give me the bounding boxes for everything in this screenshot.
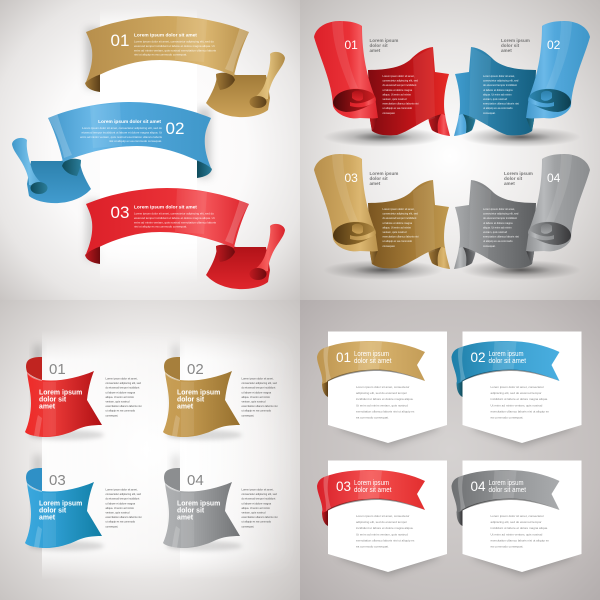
body text: incididunt ut labore et dolore magna aliqua. bbox=[356, 397, 414, 401]
label: Lorem ipsum bbox=[370, 171, 398, 176]
red ribbon text: enim ad minim veniam, quis nostrud exercitation ullamco laboris bbox=[134, 220, 216, 224]
grey flag 04 bbox=[163, 468, 278, 548]
body text: ut aliquip ex ea commodo bbox=[382, 239, 413, 243]
body text: do eiusmod tempor incididunt bbox=[242, 386, 276, 390]
body text: consequat. bbox=[483, 111, 496, 115]
label: amet bbox=[370, 181, 381, 186]
gold scroll 03 bbox=[314, 154, 450, 269]
card 03 bbox=[317, 460, 447, 572]
label: amet bbox=[501, 48, 512, 53]
paper sheets and edge shadows bbox=[30, 338, 278, 572]
ribbon heading bbox=[354, 349, 392, 365]
body text: Lorem ipsum dolor sit amet, consectetur bbox=[356, 514, 409, 518]
ribbon heading: dolor sit amet bbox=[354, 356, 392, 365]
gold ribbon text bbox=[134, 32, 216, 57]
ribbon heading: dolor sit amet bbox=[354, 485, 392, 494]
body text: consequat. bbox=[382, 244, 395, 248]
body text: Lorem ipsum dolor sit amet, bbox=[106, 488, 138, 492]
body text: adipiscing elit, sed do eiusmod tempor bbox=[490, 520, 542, 524]
number 01: 01 bbox=[49, 361, 66, 378]
label: Lorem ipsum bbox=[370, 38, 398, 43]
label: dolor sit bbox=[370, 176, 388, 181]
body text: do eiusmod tempor incididunt bbox=[483, 216, 517, 220]
blue scroll 02 bbox=[454, 21, 590, 136]
number 03: 03 bbox=[336, 479, 351, 494]
number 02: 02 bbox=[470, 350, 486, 365]
body text: consectetur adipiscing elit, sed bbox=[106, 492, 141, 496]
red ribbon text: Lorem ipsum dolor sit amet bbox=[134, 204, 197, 210]
body text: consequat. bbox=[106, 524, 118, 528]
body text: aliqua. Ut enim ad minim bbox=[483, 92, 512, 96]
flag heading: amet bbox=[39, 404, 56, 410]
body text: consectetur adipiscing elit, sed bbox=[382, 212, 418, 216]
number 03: 03 bbox=[344, 171, 358, 185]
body text: ut labore et dolore magna bbox=[483, 221, 513, 225]
body text: veniam, quis nostrud bbox=[106, 400, 130, 404]
body text: exercitation ullamco laboris nisi ut aliquip ex bbox=[356, 538, 415, 542]
body text: consequat. bbox=[242, 524, 254, 528]
ribbon heading: dolor sit amet bbox=[488, 485, 527, 494]
body text: adipiscing elit, sed do eiusmod tempor bbox=[490, 391, 542, 395]
body text: exercitation ullamco laboris nisi ut aliquip ex bbox=[356, 409, 415, 413]
ribbon 04 bbox=[452, 470, 560, 526]
gold ribbon 01 bbox=[85, 16, 285, 117]
number 02: 02 bbox=[187, 361, 204, 378]
flag heading: dolor sit bbox=[177, 508, 205, 514]
body text: Lorem ipsum dolor sit amet, consectetur bbox=[490, 385, 544, 389]
body text: Ut enim ad minim veniam, quis nostrud bbox=[356, 403, 408, 407]
ribbon heading bbox=[488, 478, 527, 494]
number 04: 04 bbox=[187, 472, 204, 489]
ribbon heading bbox=[488, 349, 527, 365]
label: Lorem ipsum bbox=[504, 171, 533, 176]
background: quadrant 3 bbox=[0, 300, 300, 600]
number 03: 03 bbox=[49, 472, 66, 489]
body text: Lorem ipsum dolor sit amet, bbox=[382, 75, 415, 78]
body text: aliqua. Ut enim ad minim bbox=[483, 225, 512, 229]
body text: Lorem ipsum dolor sit amet, bbox=[483, 75, 515, 78]
body text: incididunt ut labore et dolore magna aliqua. bbox=[490, 526, 548, 530]
label: dolor sit bbox=[504, 176, 523, 181]
body text: Ut enim ad minim veniam, quis nostrud bbox=[490, 403, 543, 407]
card 04 bbox=[452, 460, 582, 572]
body text: aliqua. Ut enim ad minim bbox=[382, 225, 411, 229]
body text: Lorem ipsum dolor sit amet, bbox=[242, 378, 274, 380]
body text: do eiusmod tempor incididunt bbox=[483, 83, 517, 87]
ribbon heading bbox=[354, 478, 392, 494]
number 03: 03 bbox=[110, 203, 129, 222]
blue ribbon text: enim ad minim veniam, quis nostrud exercitation ullamco laboris bbox=[80, 135, 163, 139]
ribbon heading: Lorem ipsum bbox=[488, 478, 524, 487]
body text: veniam, quis nostrud bbox=[483, 97, 507, 101]
gold ribbon text: eiusmod tempor incididunt ut labore et dolore magna aliqua. Ut bbox=[134, 44, 215, 48]
ribbon 01 bbox=[317, 341, 425, 397]
ribbon 02 bbox=[452, 341, 560, 397]
number 01: 01 bbox=[110, 31, 129, 50]
flag heading: dolor sit bbox=[39, 396, 67, 404]
background: quadrant 2 bbox=[300, 0, 600, 300]
red ribbon text: Lorem ipsum dolor sit amet, consectetur adipiscing elit, sed do bbox=[134, 212, 214, 216]
flag heading: amet bbox=[177, 404, 194, 410]
body text: veniam, quis nostrud bbox=[106, 510, 130, 514]
body text: exercitation ullamco laboris nisi ut aliquip ex bbox=[490, 538, 549, 542]
ground shadows bbox=[323, 127, 581, 280]
number 01: 01 bbox=[344, 38, 358, 52]
body text: ut labore et dolore magna bbox=[242, 390, 272, 394]
blue ribbon text: nisi ut aliquip ex ea commodo consequat. bbox=[109, 139, 162, 143]
body text: ea commodo consequat. bbox=[490, 416, 524, 420]
body text: consectetur adipiscing elit, sed bbox=[483, 79, 519, 83]
blue ribbon text: eiusmod tempor incididunt ut labore et dolore magna aliqua. Ut bbox=[81, 130, 162, 134]
red ribbon 03 bbox=[85, 188, 285, 289]
gold ribbon text: Lorem ipsum dolor sit amet bbox=[134, 32, 197, 38]
flag heading: dolor sit bbox=[177, 396, 205, 404]
body text: consequat. bbox=[382, 111, 395, 115]
body text: Lorem ipsum dolor sit amet, consectetur bbox=[356, 385, 409, 389]
body text: ut aliquip ex ea commodo bbox=[483, 106, 513, 110]
blue ribbon text: Lorem ipsum dolor sit amet, consectetur adipiscing elit, sed do bbox=[82, 126, 162, 130]
flag heading: Lorem ipsum bbox=[39, 390, 82, 396]
body text: veniam, quis nostrud bbox=[483, 230, 507, 234]
ribbon heading: Lorem ipsum bbox=[488, 349, 524, 358]
body text: do eiusmod tempor incididunt bbox=[106, 386, 140, 390]
body text: ut labore et dolore magna bbox=[382, 88, 413, 92]
body text: ut labore et dolore magna bbox=[242, 501, 272, 505]
flag heading: Lorem ipsum bbox=[177, 500, 220, 508]
flag heading: amet bbox=[39, 514, 56, 522]
body text: Lorem ipsum dolor sit amet, consectetur bbox=[490, 514, 544, 518]
flag heading: Lorem ipsum bbox=[39, 500, 82, 508]
label: Lorem ipsum bbox=[501, 38, 530, 43]
body text: adipiscing elit, sed do eiusmod tempor bbox=[356, 520, 407, 524]
blue flag 03 bbox=[25, 468, 142, 548]
body text: consectetur adipiscing elit, sed bbox=[483, 212, 519, 216]
body text: veniam, quis nostrud bbox=[382, 230, 407, 234]
body text: consectetur adipiscing elit, sed bbox=[106, 381, 141, 385]
number 02: 02 bbox=[166, 119, 184, 138]
body text: incididunt ut labore et dolore magna aliqua. bbox=[490, 397, 548, 401]
ribbon 03 bbox=[317, 470, 425, 526]
body text: exercitation ullamco laboris nisi ut aliquip ex bbox=[490, 409, 549, 413]
panel: four flag ribbons bbox=[25, 338, 278, 572]
panel: four scroll ribbons bbox=[314, 21, 590, 280]
body text: Lorem ipsum dolor sit amet, bbox=[382, 208, 415, 211]
label: amet bbox=[370, 48, 381, 53]
body text: aliqua. Ut enim ad minim bbox=[382, 92, 411, 96]
body text: consequat. bbox=[242, 413, 254, 417]
red ribbon text bbox=[134, 204, 216, 229]
background: quadrant 1 bbox=[0, 0, 300, 300]
body text: Lorem ipsum dolor sit amet, bbox=[483, 208, 515, 211]
body text: ut aliquip ex ea commodo bbox=[242, 520, 272, 524]
body text: aliqua. Ut enim ad minim bbox=[106, 395, 134, 399]
panel: three arc ribbons bbox=[12, 8, 285, 289]
ribbon heading: dolor sit amet bbox=[488, 356, 527, 365]
body text: consequat. bbox=[483, 244, 496, 248]
label: dolor sit bbox=[501, 43, 520, 48]
body text: aliqua. Ut enim ad minim bbox=[242, 506, 270, 510]
blue ribbon text: Lorem ipsum dolor sit amet bbox=[98, 119, 161, 125]
body text: exercitation ullamco laboris nisi bbox=[106, 515, 142, 519]
body text: do eiusmod tempor incididunt bbox=[382, 216, 417, 220]
card shadows bbox=[338, 422, 574, 575]
blue ribbon text bbox=[80, 119, 163, 143]
body text: incididunt ut labore et dolore magna aliqua. bbox=[356, 526, 414, 530]
body text: consectetur adipiscing elit, sed bbox=[382, 79, 418, 83]
body text: ut labore et dolore magna bbox=[106, 390, 136, 394]
blue ribbon 02 bbox=[12, 102, 212, 203]
body text: Lorem ipsum dolor sit amet, bbox=[106, 378, 138, 380]
body text: veniam, quis nostrud bbox=[242, 510, 266, 514]
body text: consectetur adipiscing elit, sed bbox=[242, 492, 277, 496]
body text: ea commodo consequat. bbox=[490, 544, 524, 548]
flag shadows bbox=[28, 430, 242, 551]
red flag 01 bbox=[25, 357, 142, 437]
body text: adipiscing elit, sed do eiusmod tempor bbox=[356, 391, 407, 395]
number 01: 01 bbox=[336, 350, 351, 365]
body text: exercitation ullamco laboris nisi bbox=[382, 102, 419, 106]
body text: aliqua. Ut enim ad minim bbox=[106, 506, 134, 510]
body text: Ut enim ad minim veniam, quis nostrud bbox=[356, 532, 408, 536]
card 02 bbox=[452, 332, 582, 443]
body text: ut aliquip ex ea commodo bbox=[106, 409, 136, 413]
panel: four pointed cards bbox=[317, 332, 582, 575]
body text: exercitation ullamco laboris nisi bbox=[382, 235, 419, 239]
body text: ut aliquip ex ea commodo bbox=[106, 520, 136, 524]
paper edge shadows bbox=[86, 8, 211, 283]
body text: ut aliquip ex ea commodo bbox=[483, 239, 513, 243]
body text: ea commodo consequat. bbox=[356, 544, 389, 548]
body text: aliqua. Ut enim ad minim bbox=[242, 395, 270, 399]
body text: exercitation ullamco laboris nisi bbox=[483, 102, 519, 106]
red ribbon text: nisi ut aliquip ex ea commodo consequat. bbox=[134, 225, 187, 229]
body text: exercitation ullamco laboris nisi bbox=[483, 235, 519, 239]
body text: veniam, quis nostrud bbox=[382, 97, 407, 101]
gold ribbon text: nisi ut aliquip ex ea commodo consequat. bbox=[134, 53, 187, 57]
body text: consectetur adipiscing elit, sed bbox=[242, 381, 277, 385]
label: amet bbox=[504, 181, 515, 186]
body text: do eiusmod tempor incididunt bbox=[106, 497, 140, 501]
number 04: 04 bbox=[470, 479, 486, 494]
card 01 bbox=[317, 332, 447, 443]
flag heading: dolor sit bbox=[39, 508, 67, 514]
body text: exercitation ullamco laboris nisi bbox=[242, 404, 278, 408]
background: quadrant 4 bbox=[300, 300, 600, 600]
number 02: 02 bbox=[547, 38, 561, 52]
body text: exercitation ullamco laboris nisi bbox=[242, 515, 278, 519]
red ribbon text: eiusmod tempor incididunt ut labore et dolore magna aliqua. Ut bbox=[134, 216, 215, 220]
ribbon heading: Lorem ipsum bbox=[354, 478, 389, 487]
body text: veniam, quis nostrud bbox=[242, 400, 266, 404]
body text: ut labore et dolore magna bbox=[382, 221, 413, 225]
number 04: 04 bbox=[547, 171, 561, 185]
body text: do eiusmod tempor incididunt bbox=[242, 497, 276, 501]
body text: ut aliquip ex ea commodo bbox=[242, 409, 272, 413]
body text: ea commodo consequat. bbox=[356, 416, 389, 420]
body text: ut labore et dolore magna bbox=[483, 88, 513, 92]
label: dolor sit bbox=[370, 43, 388, 48]
body text: do eiusmod tempor incididunt bbox=[382, 83, 417, 87]
body text: ut labore et dolore magna bbox=[106, 501, 136, 505]
body text: ut aliquip ex ea commodo bbox=[382, 106, 413, 110]
gold ribbon text: Lorem ipsum dolor sit amet, consectetur adipiscing elit, sed do bbox=[134, 40, 214, 44]
body text: Lorem ipsum dolor sit amet, bbox=[242, 488, 274, 492]
gold ribbon text: enim ad minim veniam, quis nostrud exercitation ullamco laboris bbox=[134, 48, 216, 52]
red scroll 01 bbox=[314, 21, 450, 136]
flag heading: amet bbox=[177, 514, 194, 522]
gold flag 02 bbox=[163, 357, 278, 437]
flag heading: Lorem ipsum bbox=[177, 390, 220, 396]
body text: Ut enim ad minim veniam, quis nostrud bbox=[490, 532, 543, 536]
body text: consequat. bbox=[106, 413, 118, 417]
body text: exercitation ullamco laboris nisi bbox=[106, 404, 142, 408]
ribbon heading: Lorem ipsum bbox=[354, 349, 389, 358]
grey scroll 04 bbox=[454, 154, 590, 269]
